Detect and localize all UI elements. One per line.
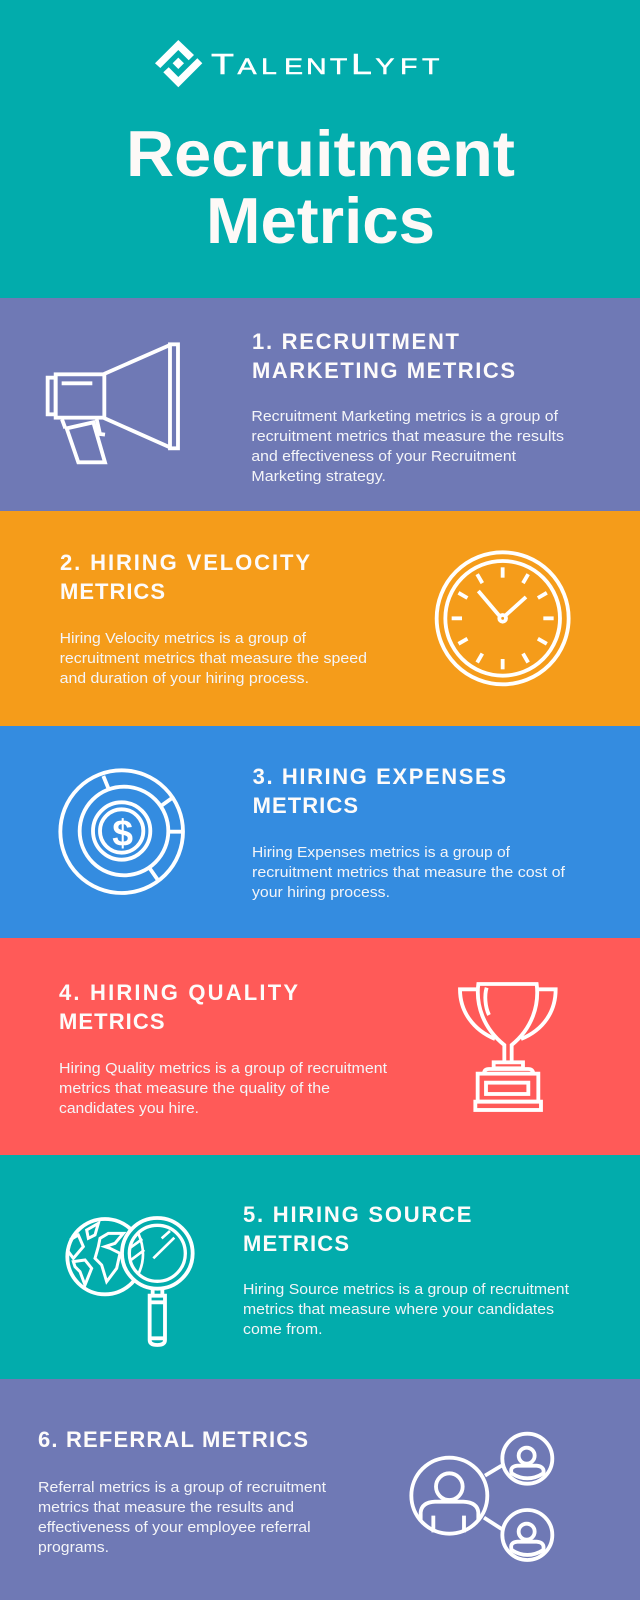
text block 6 bbox=[38, 1479, 327, 1556]
heading 5: METRICS bbox=[243, 1231, 349, 1256]
icon: clock bbox=[437, 552, 569, 684]
text block 4 bbox=[59, 1060, 388, 1117]
logo wordmark: Y bbox=[375, 55, 395, 79]
text block 3: Hiring Expenses metrics is a group of bbox=[252, 844, 511, 861]
icon: megaphone bbox=[48, 344, 178, 462]
heading 2: 2. HIRING VELOCITY bbox=[60, 550, 310, 575]
logo wordmark: F bbox=[400, 55, 417, 79]
icon: globe and magnifier bbox=[67, 1218, 193, 1345]
text block 5: come from. bbox=[243, 1321, 322, 1338]
heading 4: 4. HIRING QUALITY bbox=[59, 980, 298, 1005]
text block 4: candidates you hire. bbox=[59, 1100, 199, 1117]
logo wordmark: L bbox=[261, 55, 277, 79]
heading 2 bbox=[60, 550, 310, 604]
text block 2 bbox=[60, 630, 367, 687]
icon: dollar donut chart bbox=[60, 770, 183, 893]
panel: header bbox=[0, 0, 640, 298]
heading 4 bbox=[59, 980, 298, 1034]
panel: hiring expenses metrics bbox=[0, 726, 640, 938]
heading 1: MARKETING METRICS bbox=[252, 358, 515, 383]
text block 6: Referral metrics is a group of recruitment bbox=[38, 1479, 327, 1496]
heading 3: METRICS bbox=[253, 793, 358, 818]
text block 6: programs. bbox=[38, 1539, 109, 1556]
text block 6: metrics that measure the results and bbox=[38, 1499, 294, 1516]
text block 1: and effectiveness of your Recruitment bbox=[251, 448, 517, 465]
text block 5 bbox=[243, 1281, 570, 1338]
text block 3: recruitment metrics that measure the cost of bbox=[252, 864, 566, 881]
title bbox=[126, 117, 515, 257]
heading 3 bbox=[253, 764, 506, 818]
dollar sign: $ bbox=[112, 811, 133, 853]
logo wordmark: E bbox=[284, 55, 303, 79]
text block 4: Hiring Quality metrics is a group of recruitment bbox=[59, 1060, 388, 1077]
logo wordmark: A bbox=[238, 55, 257, 79]
logo wordmark: T bbox=[211, 49, 234, 81]
text block 1: Marketing strategy. bbox=[251, 468, 386, 485]
heading 2: METRICS bbox=[60, 579, 165, 604]
title: Recruitment bbox=[126, 117, 515, 190]
panel: recruitment marketing metrics bbox=[0, 298, 640, 511]
text block 3 bbox=[252, 844, 566, 901]
logo wordmark: L bbox=[351, 49, 372, 81]
panel: hiring quality metrics bbox=[0, 938, 640, 1155]
text block 2: recruitment metrics that measure the speed bbox=[60, 650, 367, 667]
logo: TalentLyft bbox=[155, 40, 439, 87]
heading 5: 5. HIRING SOURCE bbox=[243, 1202, 471, 1227]
text block 5: metrics that measure where your candidates bbox=[243, 1301, 554, 1318]
text block 1 bbox=[251, 408, 564, 485]
panel: hiring source metrics bbox=[0, 1155, 640, 1379]
panel: referral metrics bbox=[0, 1379, 640, 1600]
text block 1: recruitment metrics that measure the results bbox=[251, 428, 564, 445]
icon: logo diamond bbox=[155, 40, 202, 87]
heading 3: 3. HIRING EXPENSES bbox=[253, 764, 506, 789]
heading 1 bbox=[252, 329, 515, 383]
icon: referral network bbox=[411, 1434, 552, 1560]
panel: hiring velocity metrics bbox=[0, 511, 640, 726]
heading 4: METRICS bbox=[59, 1009, 164, 1034]
text block 5: Hiring Source metrics is a group of recruitment bbox=[243, 1281, 570, 1298]
logo wordmark: T bbox=[422, 55, 439, 79]
text block 2: and duration of your hiring process. bbox=[60, 670, 309, 687]
logo wordmark: N bbox=[306, 55, 327, 79]
text block 6: effectiveness of your employee referral bbox=[38, 1519, 311, 1536]
heading 6: 6. REFERRAL METRICS bbox=[38, 1427, 308, 1452]
icon: trophy bbox=[460, 984, 556, 1110]
text block 3: your hiring process. bbox=[252, 884, 390, 901]
text block 4: metrics that measure the quality of the bbox=[59, 1080, 330, 1097]
text block 1: Recruitment Marketing metrics is a group of bbox=[251, 408, 559, 425]
logo wordmark: T bbox=[330, 55, 347, 79]
heading 5 bbox=[243, 1202, 471, 1256]
heading 1: 1. RECRUITMENT bbox=[252, 329, 460, 354]
title: Metrics bbox=[206, 184, 435, 257]
text block 2: Hiring Velocity metrics is a group of bbox=[60, 630, 307, 647]
